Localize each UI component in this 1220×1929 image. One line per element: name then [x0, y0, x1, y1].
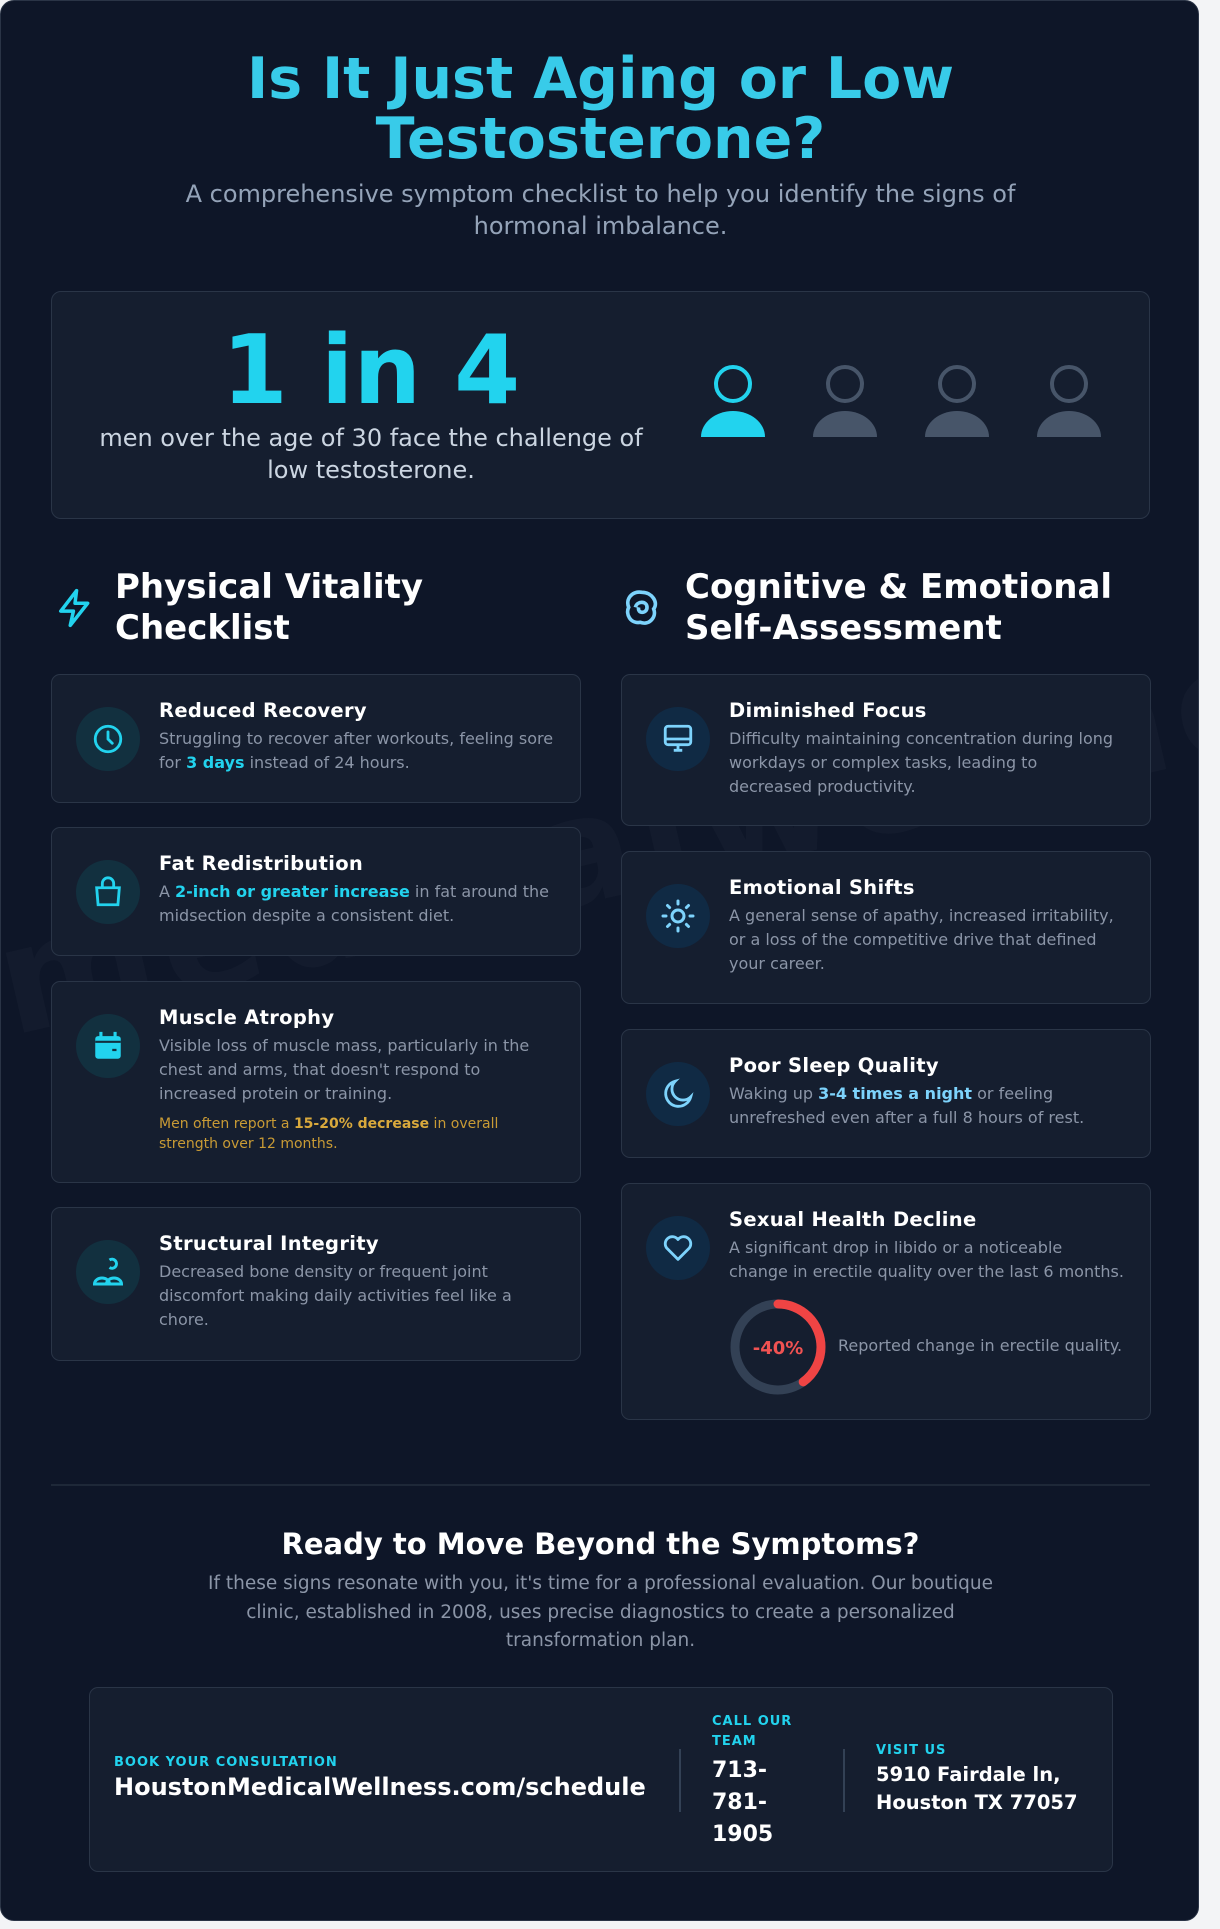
icon: calendar — [76, 1014, 140, 1078]
chart: -40% gauge: -40% — [753, 1338, 803, 1359]
icon: brain — [626, 590, 658, 625]
card: diminished focus: Diminished Focus — [729, 699, 927, 722]
panel: contact — [89, 1687, 1113, 1872]
card: sexual health: A significant drop in libido or a noticeable — [729, 1238, 1062, 1257]
card: structural integrity — [51, 1207, 581, 1361]
card: fat redistribution — [51, 827, 581, 956]
icon: person — [76, 1240, 140, 1304]
contact: address — [876, 1743, 1078, 1814]
card: emotional shifts: A general sense of apathy, increased irritability, or a loss of the competitive drive that defined your career. — [729, 906, 1114, 973]
subtitle — [186, 180, 1016, 240]
icon: clock — [76, 707, 140, 771]
chart: -40% gauge — [730, 1300, 1122, 1394]
heading: physical: Checklist — [115, 608, 290, 648]
icon: monitor — [646, 707, 710, 771]
contact: address: 5910 Fairdale ln, — [876, 1763, 1060, 1786]
card: sexual health — [621, 1183, 1151, 1420]
panel: stat 1 in 4 — [51, 291, 1150, 519]
card: reduced recovery — [51, 674, 581, 803]
CTA paragraph: If these signs resonate with you, it's time for a professional evaluation. Our boutique clinic, established in 2008, uses precise diagnostics to create a personalized transformation plan. — [208, 1573, 993, 1651]
card: poor sleep: Waking up 3-4 times a night or feeling unrefreshed even after a full 8 hours of rest. — [729, 1084, 1084, 1127]
contact: booking: HoustonMedicalWellness.com/schedule — [114, 1773, 646, 1801]
title: Testosterone? — [376, 106, 825, 172]
contact: phone: CALL OUR — [712, 1714, 792, 1729]
stat description: low testosterone. — [267, 456, 475, 484]
icon: moon — [646, 1062, 710, 1126]
icon: lightning — [58, 588, 90, 628]
card: fat redistribution: A 2-inch or greater increase in fat around the midsection despite a consistent diet. — [159, 882, 549, 925]
icon: people row — [701, 365, 1101, 437]
contact: address: VISIT US — [876, 1743, 946, 1758]
icon: bag — [76, 860, 140, 924]
heading: cognitive: Cognitive & Emotional — [685, 567, 1112, 607]
icon: heart — [646, 1216, 710, 1280]
contact: address: Houston TX 77057 — [876, 1791, 1078, 1814]
big stat: 1 in 4 — [222, 316, 520, 426]
contact: phone: TEAM — [712, 1734, 757, 1749]
card: emotional shifts: Emotional Shifts — [729, 876, 915, 899]
card: fat redistribution: Fat Redistribution — [159, 852, 363, 875]
subtitle: A comprehensive symptom checklist to help you identify the signs of — [186, 180, 1015, 208]
note: strength decrease: Men often report a 15-20% decrease in overall strength over 12 months. — [159, 1116, 498, 1152]
contact: phone: 781- — [712, 1790, 767, 1815]
card: poor sleep — [621, 1029, 1151, 1158]
heading: physical: Physical Vitality — [115, 567, 423, 607]
contact: booking — [114, 1755, 646, 1801]
contact: phone — [712, 1714, 792, 1847]
contact: phone: 1905 — [712, 1822, 773, 1847]
heading: CTA: Ready to Move Beyond the Symptoms? — [282, 1527, 919, 1561]
gauge label: Reported change in erectile quality. — [838, 1336, 1122, 1355]
contact: booking: BOOK YOUR CONSULTATION — [114, 1755, 338, 1770]
card: emotional shifts — [621, 851, 1151, 1004]
title: Is It Just Aging or Low — [247, 46, 954, 112]
card: sexual health: change in erectile quality over the last 6 months. — [729, 1262, 1124, 1281]
card: muscle atrophy: Visible loss of muscle mass, particularly in the chest and arms, that doesn't respond to increased protein or training. — [159, 1036, 529, 1103]
heading: cognitive: Self-Assessment — [685, 608, 1002, 648]
subtitle: hormonal imbalance. — [474, 212, 727, 240]
stat description — [99, 424, 644, 484]
card: poor sleep: Poor Sleep Quality — [729, 1054, 939, 1077]
heading: physical — [115, 567, 423, 648]
card: diminished focus — [621, 674, 1151, 826]
icon: sun — [646, 884, 710, 948]
contact: phone: 713- — [712, 1758, 767, 1783]
heading: cognitive — [685, 567, 1112, 648]
card: structural integrity: Structural Integrity — [159, 1232, 379, 1255]
title — [247, 46, 954, 172]
card: structural integrity: Decreased bone density or frequent joint discomfort making daily activities feel like a chore. — [159, 1262, 512, 1329]
card: muscle atrophy — [51, 981, 581, 1183]
stat description: men over the age of 30 face the challenge of — [99, 424, 643, 452]
card: reduced recovery: Struggling to recover after workouts, feeling sore for 3 days instead of 24 hours. — [159, 729, 553, 772]
card: reduced recovery: Reduced Recovery — [159, 699, 367, 722]
card: diminished focus: Difficulty maintaining concentration during long workdays or complex tasks, leading to decreased productivity. — [729, 729, 1113, 796]
card: muscle atrophy: Muscle Atrophy — [159, 1006, 334, 1029]
card: sexual health: Sexual Health Decline — [729, 1208, 976, 1231]
